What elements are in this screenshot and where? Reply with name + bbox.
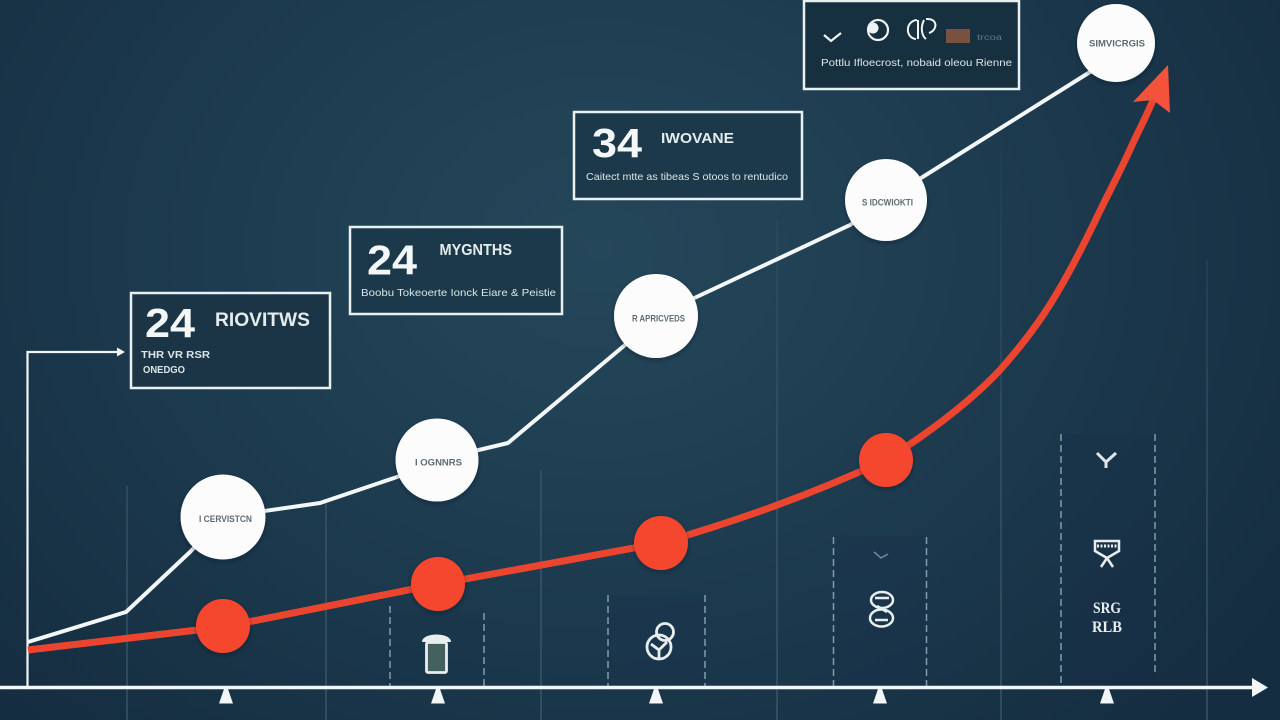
- panel: icon columns: [390, 434, 1155, 686]
- callout: 24 second: [350, 227, 562, 314]
- callout: 34: Caitect mtte as tibeas S otoos to rentudico: [586, 171, 788, 183]
- label: icon text: SRG: [1093, 600, 1121, 617]
- milestone circle 1: I CERVISTCN: [199, 514, 252, 525]
- label: icon text: [1092, 600, 1122, 636]
- red milestone markers: [196, 433, 913, 653]
- milestone circle 2: [396, 418, 478, 502]
- milestone circle 3: [614, 274, 698, 358]
- milestone circle 3: R APRICVEDS: [632, 314, 685, 324]
- callout: 34: IWOVANE: [661, 130, 734, 147]
- callout: 24 first: RIOVITWS: [215, 309, 310, 331]
- milestone circle 5: SIMVICRGIS: [1089, 38, 1145, 50]
- callout: 24 second: 24: [367, 236, 418, 284]
- callout: 24 second: MYGNTHS: [440, 242, 512, 259]
- callout: top: Pottlu Ifloecrost, nobaid oleou Rienne: [821, 57, 1012, 69]
- icon: small check mark: [874, 552, 888, 558]
- callout: 24 second: Boobu Tokeoerte Ionck Eiare & Peistie: [361, 287, 556, 299]
- label: icon text: RLB: [1092, 619, 1122, 636]
- callout: 24 first: THR VR RSR: [141, 349, 210, 361]
- time axis arrow: [0, 678, 1268, 697]
- milestone circle 4: S IDCWIOKTI: [862, 198, 913, 208]
- callout: 34: 34: [592, 120, 642, 166]
- callout: top: [804, 1, 1019, 89]
- icon: top callout glyphs: [824, 19, 1003, 43]
- callout: 24 first: [131, 293, 330, 388]
- icon: device: [422, 634, 451, 672]
- icon: hourglass: [870, 592, 893, 626]
- white growth line: [28, 43, 1116, 642]
- axis tick markers: [219, 689, 1114, 704]
- icon: knot: [647, 624, 674, 659]
- icon: red arrowhead: [1133, 65, 1170, 113]
- milestone circle 1: [180, 474, 266, 560]
- callout: 24 first: ONEDGO: [143, 364, 185, 376]
- left bracket arrow: [28, 348, 125, 686]
- callout: 24 first: 24: [145, 300, 195, 346]
- icon: top callout glyphs: trcoa: [977, 33, 1003, 42]
- milestone circle 4: [845, 159, 927, 241]
- milestone circle 2: I OGNNRS: [415, 458, 462, 468]
- icon: goblet: [1095, 541, 1119, 567]
- red growth curve: [28, 65, 1170, 650]
- icon: Y mark: [1097, 453, 1116, 468]
- milestone circle 5: [1077, 4, 1155, 82]
- callout: 34: [574, 112, 802, 199]
